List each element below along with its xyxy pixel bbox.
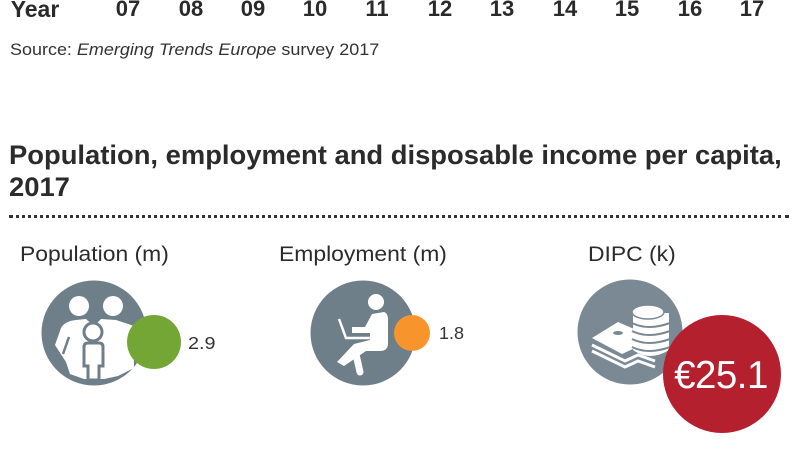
source note: Source: Emerging Trends Europe survey 2017 (10, 40, 379, 59)
heading (9, 140, 782, 202)
heading: 2017 (9, 172, 70, 202)
value: population: 2.9 (188, 333, 215, 353)
heading: Population, employment and disposable income per capita, (9, 140, 782, 170)
label: employment: Employment (m) (279, 243, 447, 266)
label: population: Population (m) (20, 243, 169, 266)
icon: money and coins (578, 280, 682, 384)
dotted divider (9, 215, 789, 218)
axis: year labels (11, 0, 764, 22)
bubble: DIPC (663, 315, 781, 433)
label: DIPC: DIPC (k) (588, 243, 676, 266)
bubble: population 2.9 (127, 315, 181, 369)
value: employment: 1.8 (439, 323, 464, 343)
icon: family (42, 280, 146, 386)
bubble: employment 1.8 (394, 315, 430, 351)
bubble: DIPC: €25.1 (674, 354, 768, 397)
icon: person with laptop (310, 280, 416, 386)
